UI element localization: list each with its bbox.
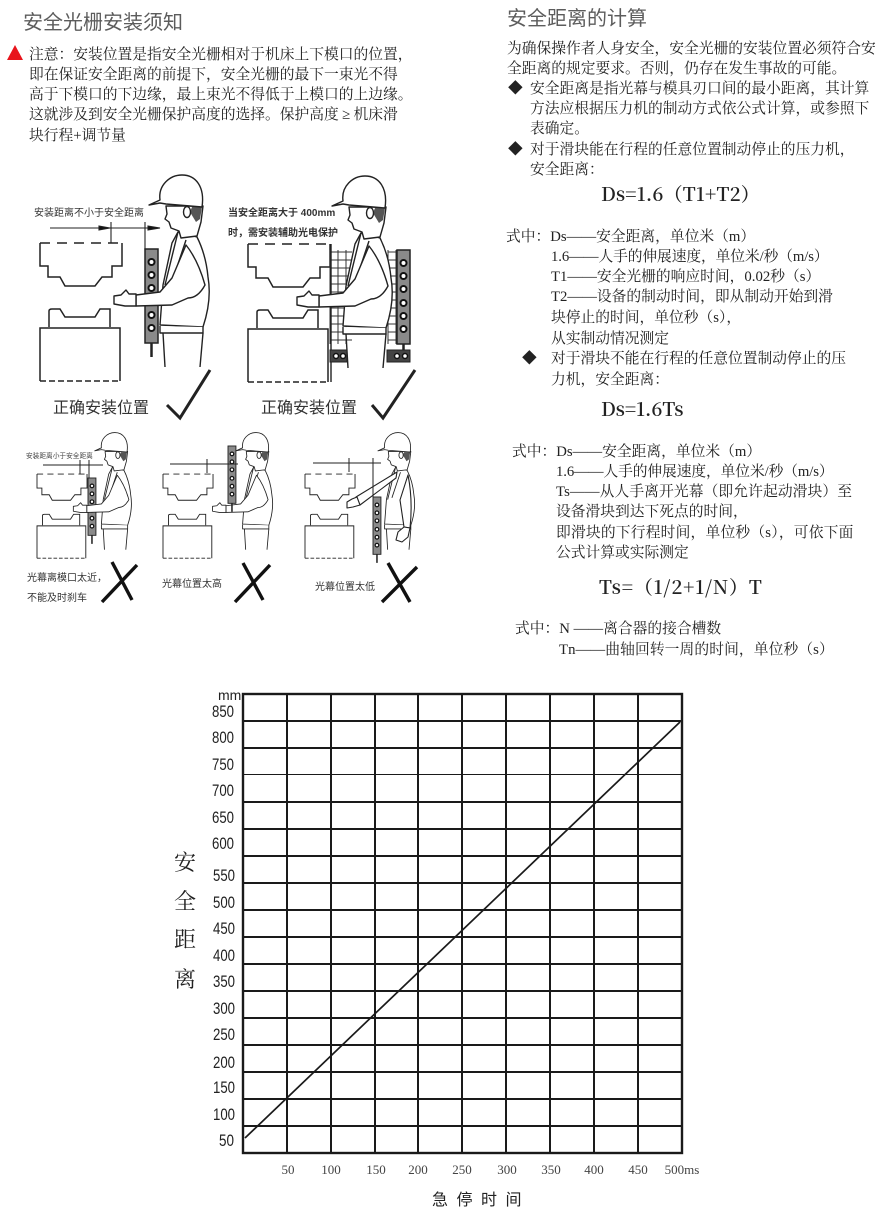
text block: installation note: 即在保证安全距离的前提下，安全光栅的最下一束光不得: [29, 67, 398, 83]
x axis tick labels: 150: [366, 1162, 386, 1177]
y axis tick labels: 500: [213, 894, 235, 912]
text block: formula 2 definitions: 公式计算或实际测定: [556, 545, 689, 561]
y axis tick labels: 150: [213, 1079, 235, 1097]
icon: cross: [382, 563, 417, 602]
heading: installation notes: 安全光栅安装须知: [23, 12, 183, 34]
formula: Ds with T1 and T2: Ds=1.6（T1+T2）: [601, 180, 760, 207]
chart: safety distance vs stopping time: [174, 687, 699, 1209]
illustration: correct position, distance not less than safety distance: [34, 175, 210, 418]
y axis tick labels: 250: [213, 1026, 235, 1044]
icon: check mark: [372, 370, 415, 418]
icon: light curtain: [88, 478, 96, 544]
icon: light curtain: [373, 497, 381, 563]
icon: check mark: [167, 370, 210, 418]
y axis tick labels: 50: [219, 1132, 234, 1150]
y axis tick labels: [212, 703, 235, 1150]
text block: formula 1 definitions: 力机，安全距离：: [551, 372, 669, 388]
y axis tick labels: 750: [212, 756, 234, 774]
formula: Ds with Ts: Ds=1.6Ts: [601, 395, 684, 422]
y axis title: [174, 846, 196, 994]
text block: formula 1 definitions: T1——安全光栅的响应时间，0.02秒（s）: [551, 269, 820, 285]
formula: Ts: Ts=（1/2+1/N）T: [599, 573, 763, 600]
x axis tick labels: 200: [408, 1162, 428, 1177]
text block: safety distance explanation: 方法应根据压力机的制动方式依公式计算，或参照下: [530, 101, 869, 117]
y axis title: 安: [174, 846, 196, 877]
caption: correct position: 正确安装位置: [261, 399, 357, 417]
text block: safety distance explanation: 表确定。: [530, 121, 589, 137]
auxiliary photoelectric grid: [330, 244, 398, 382]
y axis tick labels: 200: [213, 1054, 235, 1072]
icon: light curtain: [228, 446, 236, 512]
arm raised and lowered hand: [347, 472, 411, 542]
illustration: curtain too close: [26, 433, 137, 604]
y axis tick labels: 550: [213, 867, 235, 885]
icon: cross: [235, 563, 270, 602]
y axis title: 离: [174, 963, 196, 994]
arrow: distance dimension: [170, 459, 238, 473]
x axis tick labels: 400: [584, 1162, 604, 1177]
x axis tick labels: 450: [628, 1162, 648, 1177]
text block: safety distance explanation: 安全距离是指光幕与模具刃口间的最小距离，其计算: [530, 81, 869, 97]
text block: formula 1 definitions: 1.6——人手的伸展速度，单位米/秒（m/s）: [551, 249, 829, 265]
text block: safety distance explanation: 全距离的规定要求。否则，仍存在发生事故的可能。: [507, 61, 846, 77]
text block: formula 3 definitions: 式中：N ——离合器的接合槽数: [515, 621, 721, 637]
x axis title: 急停时间: [432, 1191, 530, 1209]
text block: installation note: 高于下模口的下边缘，最上束光不得低于上模口的上边缘。: [29, 87, 412, 103]
text block: formula 1 definitions: [506, 228, 846, 388]
x axis tick labels: 50: [282, 1162, 294, 1177]
callout: over 400mm note: 当安全距离大于 400mm: [228, 206, 335, 219]
y axis tick labels: 600: [212, 835, 234, 853]
caption: too close: 光幕离模口太近，: [27, 571, 107, 584]
y axis tick labels: 400: [213, 947, 235, 965]
text block: formula 1 definitions: 块停止的时间，单位秒（s），: [551, 310, 741, 326]
text block: formula 2 definitions: 式中：Ds——安全距离，单位米（m）: [512, 444, 761, 460]
arrow: safety distance dimension: [50, 222, 160, 250]
text block: formula 2 definitions: [512, 443, 854, 561]
y axis title: 距: [174, 923, 196, 954]
heading: safety distance calculation: 安全距离的计算: [507, 8, 647, 30]
text block: safety distance explanation: ◆: [508, 81, 523, 97]
text block: formula 2 definitions: Ts——从人手离开光幕（即允许起动滑块）至: [556, 484, 852, 500]
text block: installation note: [29, 46, 412, 144]
icon: red warning triangle: [7, 45, 23, 60]
icon: lower horizontal curtain units: [330, 350, 410, 362]
text block: formula 3 definitions: Tn——曲轴回转一周的时间，单位秒（s）: [559, 642, 834, 658]
text block: formula 1 definitions: 对于滑块不能在行程的任意位置制动停止的压: [551, 351, 846, 367]
y axis unit: mm: [218, 687, 241, 703]
y axis tick labels: 350: [213, 973, 235, 991]
icon: light curtain: [397, 250, 410, 358]
callout: distance note: 安装距离不小于安全距离: [34, 206, 144, 219]
caption: correct position: 正确安装位置: [53, 399, 149, 417]
x axis tick labels: 100: [321, 1162, 341, 1177]
text block: safety distance explanation: ◆: [508, 142, 523, 158]
chart line: [245, 722, 680, 1138]
y axis tick labels: 700: [212, 782, 234, 800]
text block: formula 2 definitions: 即滑块的下行程时间，单位秒（s），可依下面: [556, 525, 854, 541]
callout: distance less than safety distance: 安装距离小于安全距离: [26, 451, 93, 460]
text block: installation note: 注意：安装位置是指安全光栅相对于机床上下模口的位置，: [29, 47, 412, 63]
illustration: curtain too high: [162, 433, 273, 602]
icon: light curtain: [145, 249, 158, 357]
text block: formula 1 definitions: ◆: [522, 351, 537, 367]
x axis tick labels: 300: [497, 1162, 517, 1177]
icon: cross: [102, 562, 137, 602]
y axis title: 全: [174, 885, 196, 916]
y axis tick labels: 450: [213, 920, 235, 938]
x axis tick labels: 250: [452, 1162, 472, 1177]
text block: formula 2 definitions: 设备滑块到达下死点的时间，: [556, 504, 748, 520]
caption: too low: 光幕位置太低: [315, 580, 375, 593]
text block: formula 3 definitions: [515, 620, 834, 658]
text block: safety distance explanation: 安全距离：: [530, 162, 604, 178]
caption: too high: 光幕位置太高: [162, 577, 222, 590]
y axis tick labels: 850: [212, 703, 234, 721]
x axis tick labels: [282, 1162, 699, 1177]
callout: over 400mm note: 时，需安装辅助光电保护: [228, 226, 338, 239]
text block: installation note: 块行程+调节量: [29, 128, 126, 144]
illustration: correct position with auxiliary curtain: [228, 176, 415, 418]
caption: too close: 不能及时刹车: [27, 591, 87, 604]
illustration: curtain too low: [305, 433, 417, 602]
arrow: distance dimension: [313, 458, 381, 497]
chart grid: [243, 694, 682, 1153]
text block: formula 2 definitions: 1.6——人手的伸展速度，单位米/秒（m/s）: [556, 464, 834, 480]
y axis tick labels: 650: [212, 809, 234, 827]
y axis tick labels: 300: [213, 1000, 235, 1018]
x axis tick labels: 500ms: [665, 1162, 699, 1177]
y axis tick labels: 800: [212, 729, 234, 747]
x axis tick labels: 350: [541, 1162, 561, 1177]
text block: installation note: 这就涉及到安全光栅保护高度的选择。保护高度 机床滑: [29, 107, 398, 123]
text block: installation note: ≥: [342, 107, 350, 123]
y axis tick labels: 100: [213, 1106, 235, 1124]
arrow: distance dimension: [43, 460, 103, 478]
text block: formula 1 definitions: T2——设备的制动时间，即从制动开始到滑: [551, 289, 833, 305]
text block: safety distance explanation: [507, 40, 876, 178]
text block: safety distance explanation: 为确保操作者人身安全，安全光栅的安装位置必须符合安: [507, 41, 876, 57]
text block: safety distance explanation: 对于滑块能在行程的任意位置制动停止的压力机，: [530, 142, 854, 158]
text block: formula 1 definitions: 从实制动情况测定: [551, 331, 669, 347]
text block: formula 1 definitions: 式中：Ds——安全距离，单位米（m）: [506, 229, 755, 245]
